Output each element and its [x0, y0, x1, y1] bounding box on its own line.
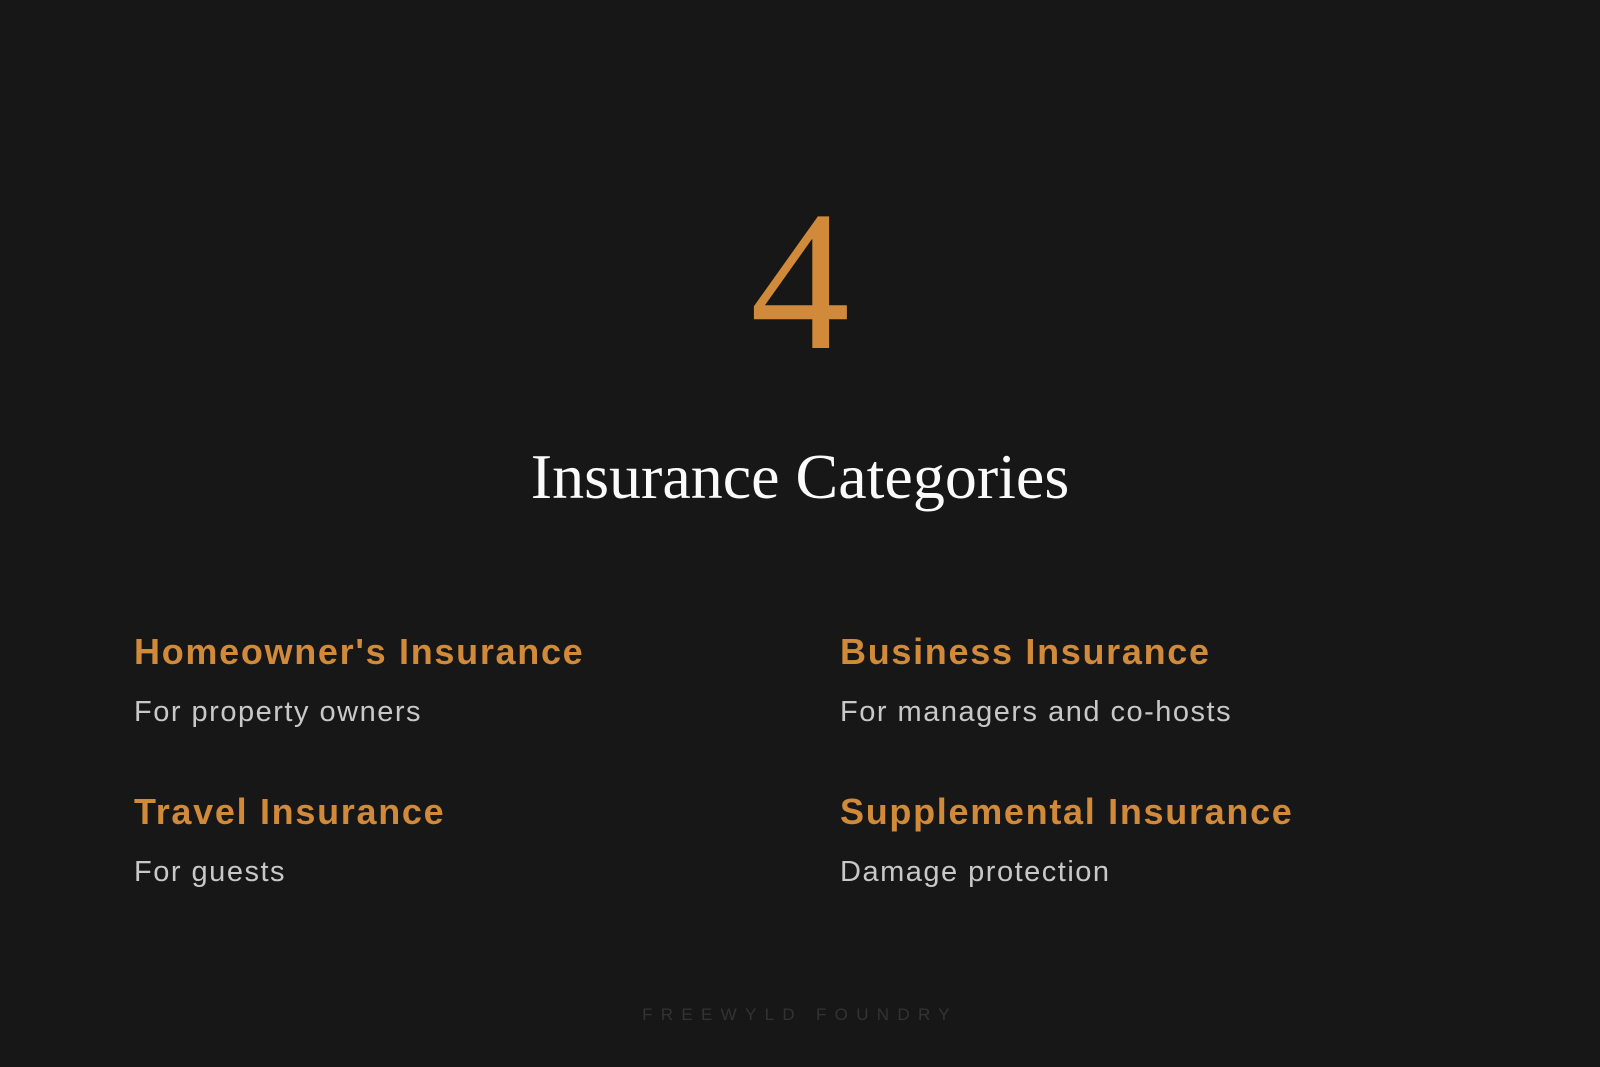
item: supplemental: Supplemental Insurance	[840, 791, 1294, 832]
big number: 4	[750, 171, 850, 392]
item: homeowner: For property owners	[134, 696, 422, 728]
item: supplemental: Damage protection	[840, 856, 1111, 888]
item: business	[840, 631, 1232, 728]
item: homeowner	[134, 631, 584, 728]
item: travel	[134, 791, 445, 888]
item: supplemental	[840, 791, 1294, 888]
footer: FREEWYLD FOUNDRY	[642, 1005, 958, 1024]
item: business: Business Insurance	[840, 631, 1211, 672]
item: business: For managers and co-hosts	[840, 696, 1232, 728]
item: travel: Travel Insurance	[134, 791, 445, 832]
title: Insurance Categories	[531, 441, 1069, 512]
item: travel: For guests	[134, 856, 286, 888]
item: homeowner: Homeowner's Insurance	[134, 631, 584, 672]
